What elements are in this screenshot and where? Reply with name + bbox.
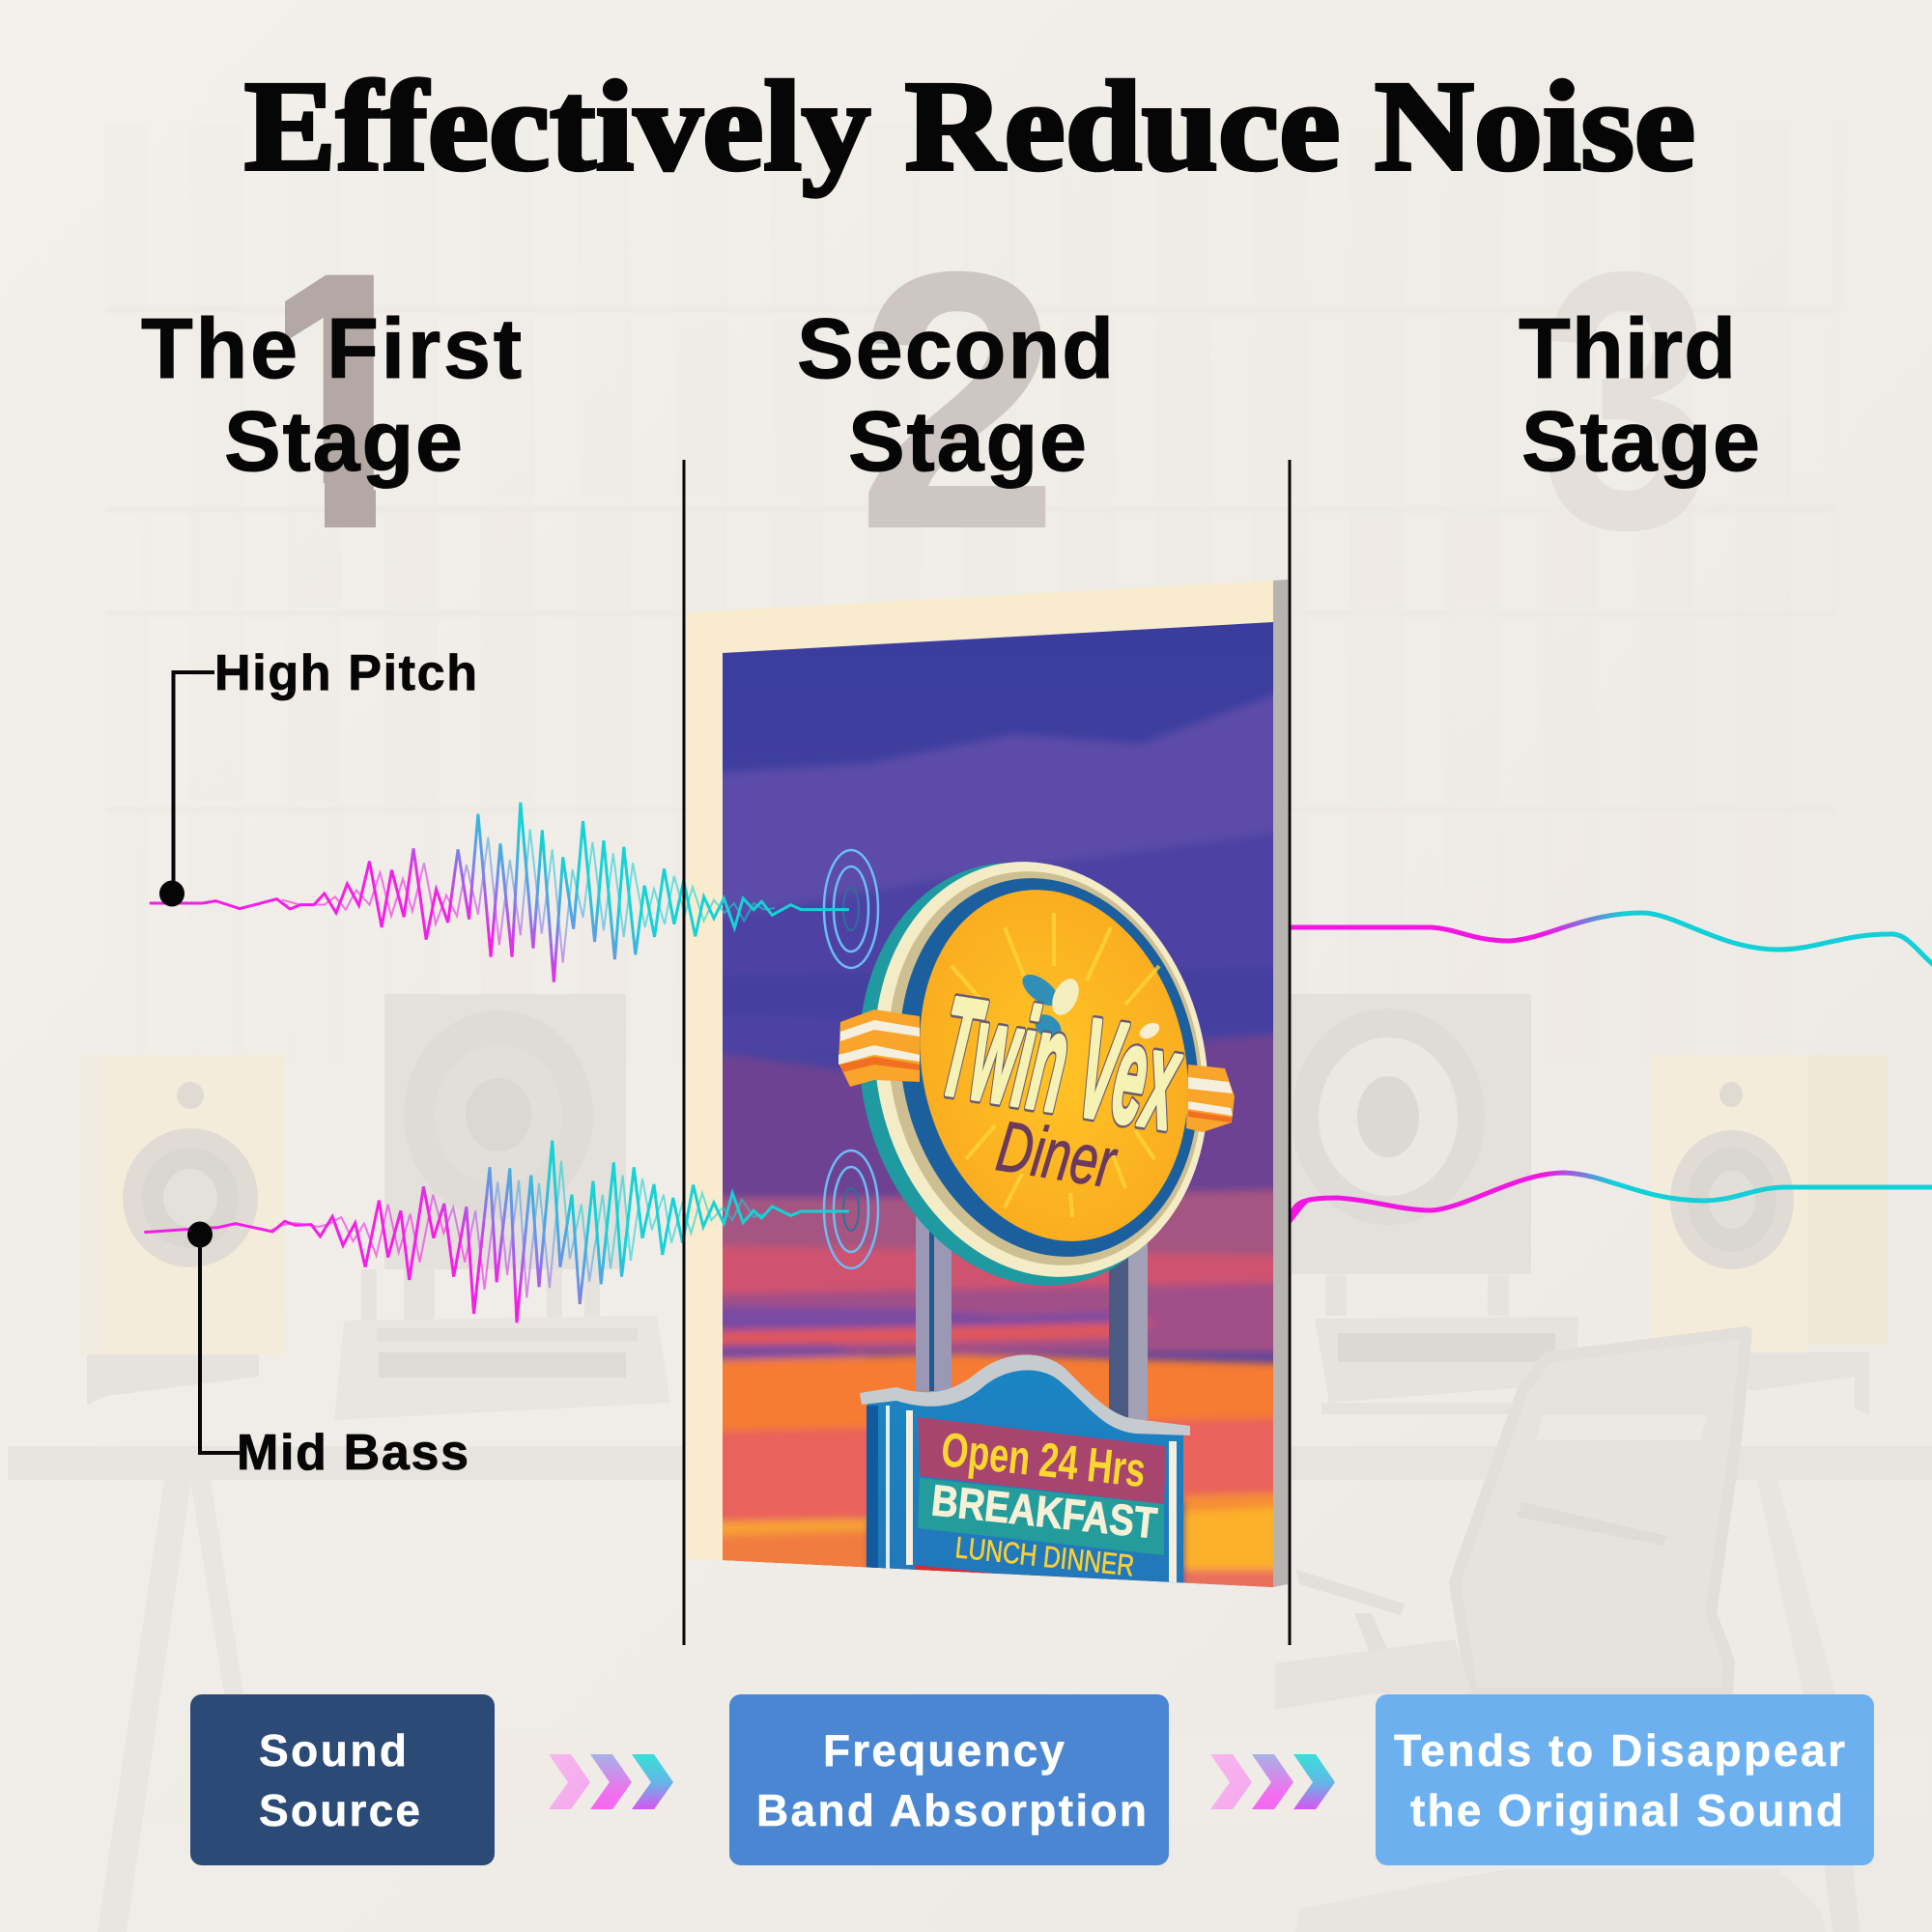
sign text: Twin Vex	[943, 993, 1184, 1134]
heading: the first stage: The First	[141, 300, 522, 396]
heading: third stage: Stage	[1521, 393, 1760, 489]
box: frequency band absorption: Frequency	[823, 1725, 1065, 1776]
panel: acoustic board with diner artwork	[688, 580, 1288, 1604]
arrows: chevrons two	[1210, 1754, 1335, 1809]
right stripe bands	[1186, 1065, 1235, 1132]
callout: high pitch: High Pitch	[214, 645, 477, 701]
callout: mid bass: Mid Bass	[237, 1425, 469, 1481]
box: sound source	[190, 1694, 495, 1865]
target rings: mid bass	[824, 1151, 878, 1268]
office chair	[1275, 1332, 1826, 1932]
waveform: high pitch	[150, 803, 849, 982]
sign text: Diner: Diner	[992, 1105, 1122, 1204]
box: tends to disappear the original sound	[1376, 1694, 1874, 1865]
waveform: mid bass	[144, 1141, 849, 1322]
box: sound source: Source	[259, 1785, 420, 1835]
box: frequency band absorption	[729, 1694, 1169, 1865]
heading: second stage	[797, 300, 1114, 489]
box: tends to disappear the original sound: Tends to Disappear	[1394, 1725, 1845, 1776]
residual wave: lower	[1290, 1173, 1932, 1225]
callout: mid bass	[187, 1221, 469, 1481]
target rings: high pitch	[824, 850, 878, 968]
left stripe bands	[838, 1009, 920, 1087]
number 3: 3	[1540, 195, 1714, 606]
heading: third stage	[1519, 300, 1760, 489]
bird emblem	[1022, 974, 1159, 1039]
box: sound source: Sound	[259, 1725, 407, 1776]
left cream speaker	[80, 1055, 284, 1406]
menu text: BREAKFAST: BREAKFAST	[929, 1475, 1159, 1548]
box: tends to disappear the original sound: the Original Sound	[1410, 1785, 1843, 1835]
heading: second stage: Stage	[848, 393, 1087, 489]
large stage numbers	[238, 195, 1714, 606]
desk left	[8, 1446, 684, 1932]
board cream frame	[688, 581, 1273, 1587]
menu text: LUNCH DINNER: LUNCH DINNER	[953, 1530, 1136, 1582]
menu panel: teal band	[918, 1478, 1164, 1555]
artwork: oval diner sign: Twin Vex	[931, 967, 1191, 1159]
left dark speaker	[361, 994, 626, 1321]
artwork: oval diner sign: Twin Vex	[931, 967, 1191, 1159]
right cream speaker	[1652, 1055, 1889, 1415]
number 1: 1	[238, 195, 441, 606]
heading: the first stage	[141, 300, 522, 489]
left keyboard	[334, 1316, 670, 1420]
box: frequency band absorption: Band Absorption	[756, 1785, 1147, 1835]
sun rays	[952, 913, 1159, 1217]
heading: second stage: Second	[797, 300, 1114, 396]
menu text: Open 24 Hrs: Open 24 Hrs	[939, 1422, 1149, 1497]
divider line left	[682, 460, 686, 1645]
menu panel: red band	[918, 1417, 1166, 1504]
artwork: sunset sky	[715, 618, 1285, 1604]
menu panel: red bottom stripe	[915, 1565, 997, 1574]
artwork: sign posts	[916, 1203, 1148, 1420]
right dark speaker	[1292, 994, 1531, 1316]
arrows: chevrons one	[549, 1754, 673, 1809]
residual wave: upper	[1290, 913, 1932, 968]
desk right	[1292, 1446, 1932, 1932]
artwork: oval diner sign	[838, 862, 1235, 1286]
heading: the first stage: Stage	[224, 393, 463, 489]
artwork: lower menu sign	[860, 1355, 1190, 1604]
heading: third stage: Third	[1519, 300, 1736, 396]
board side edge	[1273, 580, 1288, 1587]
number 2: 2	[856, 195, 1060, 606]
title: Effectively Reduce Noise	[244, 54, 1695, 197]
divider line right	[1289, 460, 1291, 1645]
right keyboard	[1315, 1317, 1578, 1414]
callout: high pitch	[159, 645, 477, 906]
